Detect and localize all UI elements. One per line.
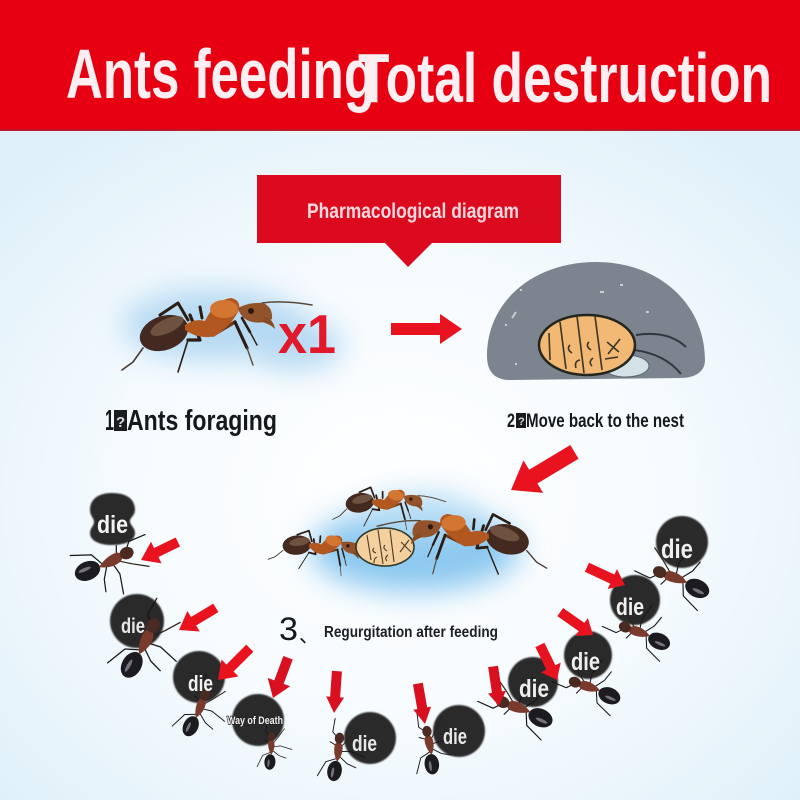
dead ant group 7 — [474, 657, 566, 741]
arrow 6 — [409, 682, 434, 726]
multiplier x1: x1 — [278, 303, 336, 365]
step 2 label: Move back to the nest — [526, 410, 684, 432]
step 1 label: 1 — [105, 405, 114, 437]
dead ant group 9: die — [616, 594, 644, 621]
header band — [0, 0, 800, 131]
ant: foraging — [122, 298, 312, 372]
larva — [539, 315, 635, 375]
arrow 5 — [325, 670, 346, 714]
arrow 8 — [530, 640, 567, 685]
cloud: step 1 — [123, 289, 343, 371]
step 1 label: ? — [116, 414, 125, 431]
dead ant group 2: die — [121, 615, 145, 638]
step 3 label — [279, 611, 498, 647]
ant: large feeding — [377, 506, 547, 584]
title: ants feeding: Ants feeding — [66, 35, 375, 113]
dead ant group 3: die — [188, 671, 213, 696]
larva: shared — [356, 528, 414, 566]
arrow 3 — [210, 640, 258, 688]
dead ant group 6: die — [443, 724, 467, 749]
step 1 label: Ants foraging — [127, 405, 277, 437]
ant: small feeding — [268, 520, 383, 588]
dead ant group 1 — [67, 493, 163, 608]
dead ant group 4 — [227, 694, 294, 772]
dead ant group 2 — [106, 593, 199, 695]
arrow 9 — [554, 603, 599, 644]
arrow 4 — [262, 654, 299, 702]
dead ant group 4: Way of Death — [227, 715, 283, 727]
dead ant group 10 — [631, 516, 723, 612]
dead ant group 1: die — [97, 511, 128, 539]
step 3 label: Regurgitation after feeding — [324, 624, 498, 641]
step 2 label: ? — [518, 416, 525, 428]
arrow: to feeding — [501, 436, 584, 506]
dead ant group 8 — [549, 631, 632, 717]
step 3 label: 3 — [279, 611, 298, 647]
dead ant group 7: die — [519, 675, 549, 703]
step 2 label: 2 — [507, 411, 515, 432]
banner: pharmacological diagram — [257, 175, 561, 267]
dead ant group 5: die — [352, 731, 377, 756]
nest with larva — [487, 262, 705, 380]
ant: upper feeding — [332, 479, 446, 539]
dead ant group 3 — [171, 651, 240, 748]
arrow 1 — [136, 531, 183, 571]
dead ant group 8: die — [571, 648, 600, 676]
arrow: to nest — [391, 314, 462, 344]
dead ant group 9 — [599, 575, 682, 662]
banner: pharmacological diagram: Pharmacological diagram — [307, 200, 519, 223]
dead ant group 5 — [317, 712, 396, 786]
dead ant group 10: die — [661, 534, 693, 564]
step 3 label: 、 — [299, 625, 319, 647]
dead ant group 6 — [409, 705, 485, 776]
cloud: step 3 — [310, 493, 520, 592]
arrow 10 — [582, 557, 630, 595]
arrow 2 — [173, 598, 222, 640]
arrow 7 — [484, 665, 508, 707]
